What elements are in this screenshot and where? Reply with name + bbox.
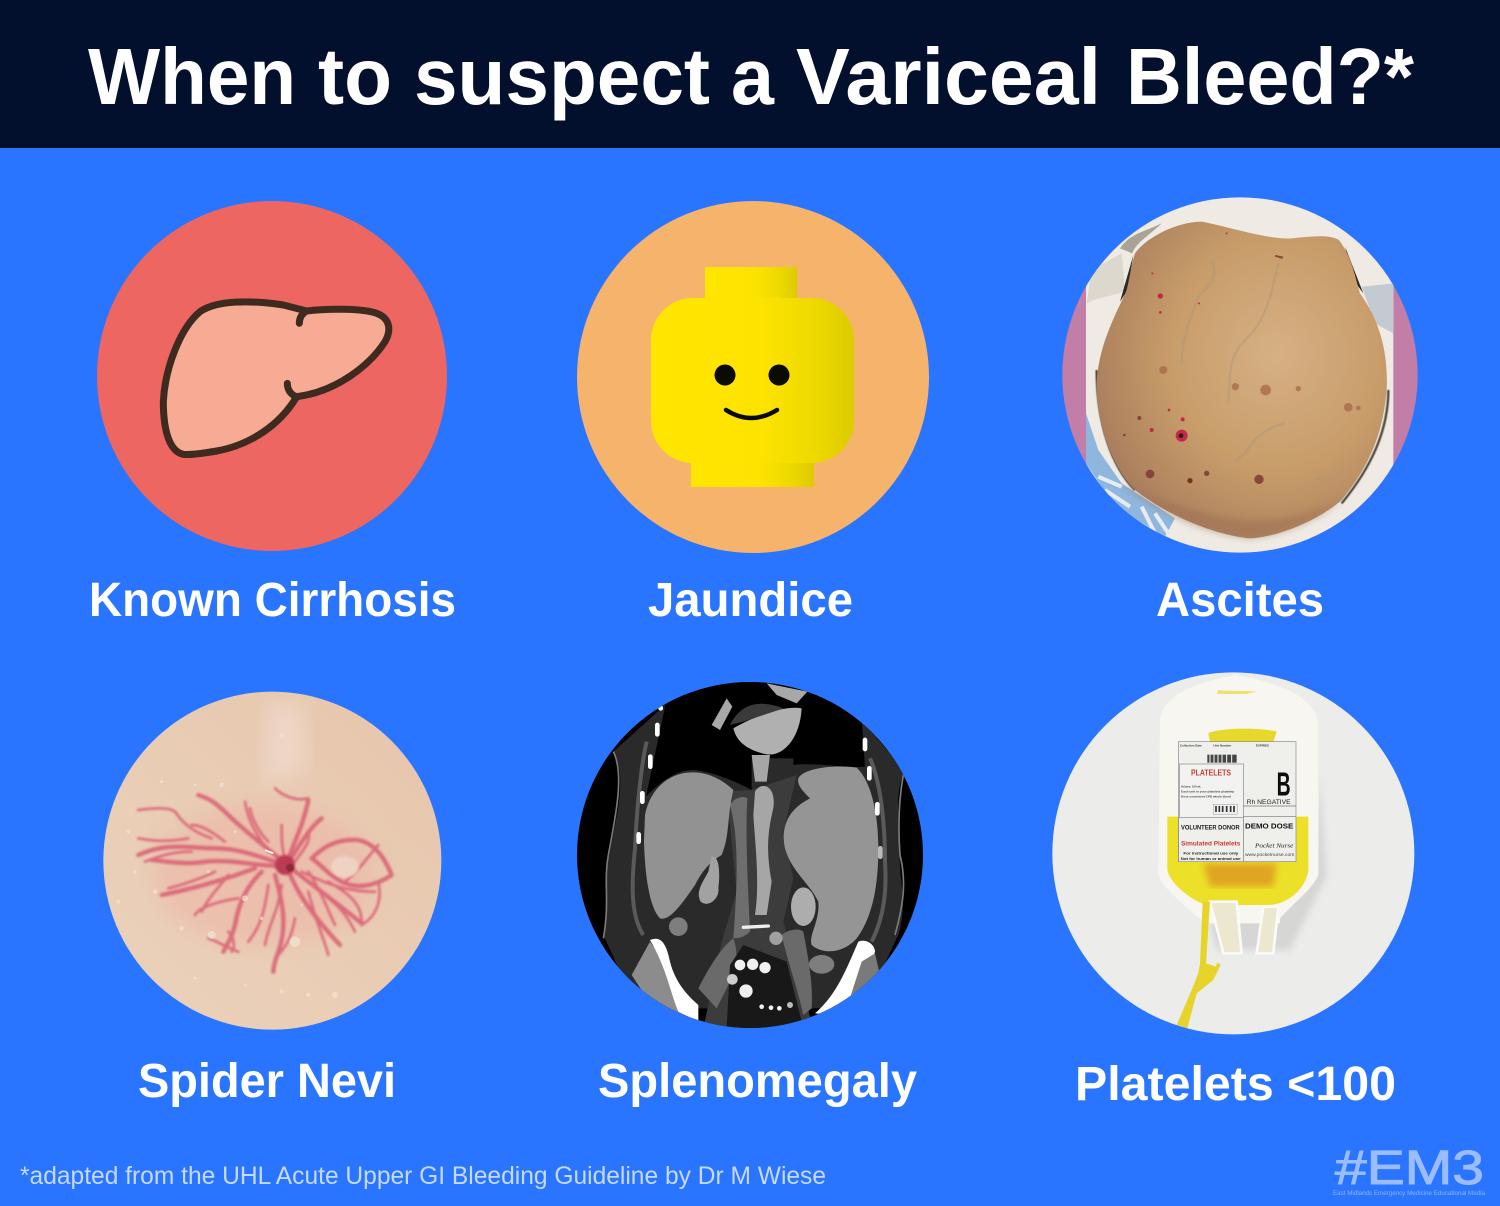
spleen on CT — [784, 767, 878, 951]
liver on CT — [644, 772, 733, 919]
title banner — [0, 0, 1500, 148]
bag — [1158, 675, 1318, 923]
photo: platelet bag: Not for human or animal use — [1181, 857, 1241, 861]
photo: platelet bag: Simulated Platelets — [1181, 841, 1241, 848]
label: spider nevi: Spider Nevi — [138, 1055, 396, 1108]
photo: platelet bag: Each unit in your platelets plateletp — [1181, 789, 1235, 793]
photo: platelet bag: Unit Number — [1213, 744, 1232, 748]
logo: EM3: #EM3 — [1335, 1142, 1484, 1195]
panel: platelets — [1050, 670, 1420, 1111]
photo: platelet bag: For instructional use only — [1183, 852, 1240, 856]
icon: liver — [97, 201, 447, 551]
footnote: *adapted from the UHL Acute Upper GI Bleeding Guideline by Dr M Wiese — [20, 1162, 826, 1190]
title banner: When — [88, 32, 296, 121]
photo: platelet bag: Pocket Nurse — [1254, 842, 1293, 849]
pelvis — [632, 942, 698, 1018]
ports and tube — [1210, 902, 1242, 953]
photo: platelet bag: B — [1277, 766, 1291, 803]
label: platelets: Platelets <100 — [1075, 1058, 1396, 1111]
photo: platelet bag: Collection Date — [1180, 744, 1202, 748]
title banner: suspect — [414, 32, 710, 121]
photo: platelet bag — [1050, 670, 1420, 1040]
photo: platelet bag: PLATELETS — [1191, 768, 1231, 778]
photo: platelet bag: DEMO DOSE — [1245, 823, 1294, 830]
panel: jaundice — [577, 201, 929, 627]
label: splenomegaly: Splenomegaly — [598, 1055, 917, 1108]
title banner: Variceal — [796, 32, 1101, 121]
panel: known cirrhosis — [89, 201, 456, 627]
panel: ascites — [1062, 190, 1418, 627]
label: ascites: Ascites — [1156, 574, 1324, 627]
photo: spider naevus on skin — [95, 685, 450, 1035]
kidneys — [699, 857, 719, 904]
title banner: to — [318, 32, 392, 121]
mediastinum and spine — [703, 775, 813, 1028]
label sticker — [1178, 742, 1296, 862]
photo: platelet bag: www.pocketnurse.com — [1245, 852, 1295, 857]
icon: yellow figure head — [577, 201, 929, 553]
logo: EM3: East Midlands Emergency Medicine Educational Media — [1333, 1191, 1486, 1197]
panel: splenomegaly — [570, 675, 930, 1108]
title banner: Bleed?* — [1126, 32, 1415, 121]
title banner: a — [731, 32, 774, 121]
label: known cirrhosis: Known Cirrhosis — [89, 574, 456, 627]
photo: platelet bag: EXPIRES — [1256, 744, 1269, 748]
photo: platelet bag: Dose consistent CPD whole blood — [1181, 794, 1231, 798]
heart — [733, 708, 802, 755]
label: jaundice: Jaundice — [648, 574, 853, 627]
photo: platelet bag: Volume: 150 mL — [1181, 784, 1202, 788]
photo: coronal CT scan — [570, 675, 930, 1035]
panel: spider nevi — [95, 685, 450, 1108]
photo: platelet bag: Rh NEGATIVE — [1247, 799, 1291, 806]
photo: platelet bag: VOLUNTEER DONOR — [1181, 824, 1240, 831]
photo: distended abdomen — [1062, 190, 1418, 560]
